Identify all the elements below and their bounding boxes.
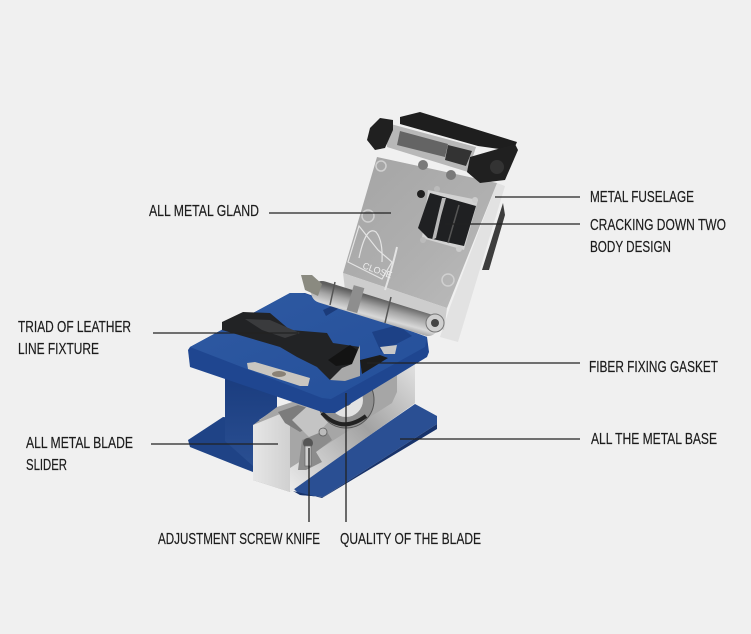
icon: blue top block (188, 293, 429, 413)
icon: black lid handle (367, 112, 518, 183)
icon: circular blade (318, 372, 374, 428)
fiber cleaver product illustration (188, 112, 518, 498)
leader lines (151, 197, 580, 522)
icon: fiber fixing gasket (360, 345, 397, 374)
label: all metal gland: ALL METAL GLAND (149, 203, 259, 220)
label: triad of leather line fixture: TRIAD OF LEATHER (18, 319, 131, 336)
icon: black fiber clamp (222, 312, 360, 381)
label: cracking down two body design: BODY DESIGN (590, 239, 671, 256)
label: cracking down two body design (590, 217, 726, 256)
icon: silver blade carriage (253, 362, 415, 492)
label: all metal blade slider: ALL METAL BLADE (26, 435, 133, 452)
icon: adjustment screw (298, 428, 332, 470)
label: triad of leather line fixture (18, 319, 131, 358)
label: metal fuselage: METAL FUSELAGE (590, 189, 694, 206)
icon: lid close logo: CLOSE (361, 260, 393, 280)
icon: back plate of lid (343, 157, 505, 342)
label: all metal blade slider (26, 435, 133, 474)
icon: hinge (301, 275, 444, 332)
label: triad of leather line fixture: LINE FIXTURE (18, 341, 99, 358)
label: adjustment screw knife: ADJUSTMENT SCREW KNIFE (158, 531, 320, 548)
icon: lid pressure pads (418, 186, 478, 252)
icon: lid plate rivets (362, 160, 456, 286)
label: quality of the blade: QUALITY OF THE BLADE (340, 531, 481, 548)
icon: cleaver base (188, 375, 437, 498)
label: all metal blade slider: SLIDER (26, 457, 67, 474)
icon: lid close logo (348, 226, 397, 290)
